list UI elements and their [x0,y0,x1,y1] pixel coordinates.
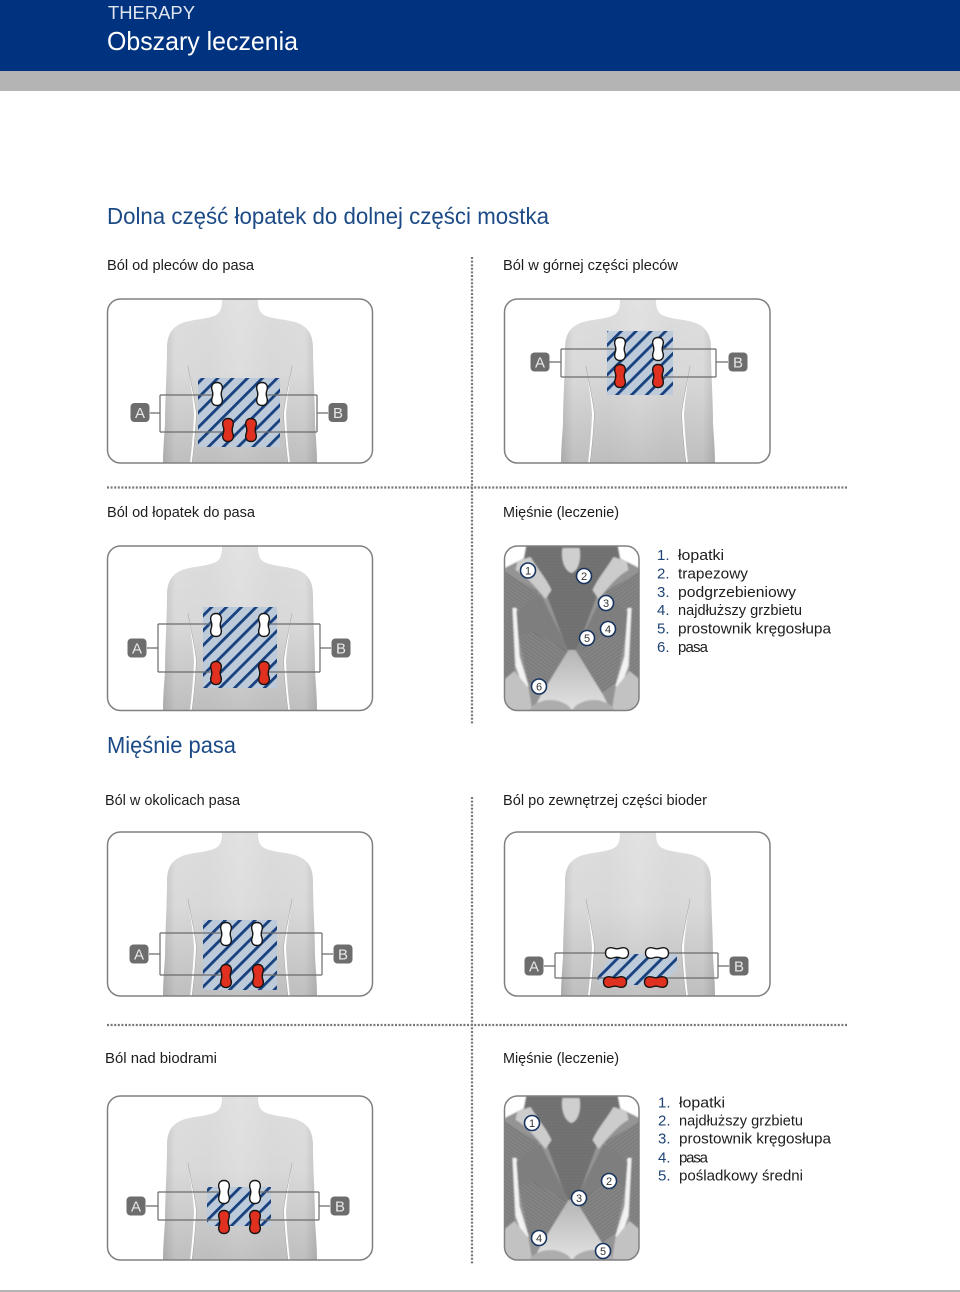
legend: muscles 1: 1. [657,547,670,564]
legend: muscles 2: łopatki [679,1094,725,1112]
panel: muscles diagram 1: 5 [584,633,590,645]
heading: section 1: Dolna część łopatek do dolnej części mostka [107,203,549,229]
legend: muscles 1: pasa [678,639,709,656]
panel: muscles diagram 1: 2 [581,571,587,583]
panel: pain in upper back: A [535,354,545,372]
legend: muscles 2: 3. [658,1130,671,1148]
legend: muscles 1: 3. [657,584,670,601]
subheading: Ból w górnej części pleców [503,257,678,274]
panel: muscles diagram 1: 4 [605,624,611,636]
panel: muscles diagram 1: 1 [525,566,531,578]
legend: muscles 1: trapezowy [678,566,749,582]
panel: pain from back to waist [108,299,372,463]
legend: muscles 2: prostownik kręgosłupa [679,1130,832,1148]
legend: muscles 2: pasa [679,1150,709,1166]
panel: muscles diagram 2 [502,1094,642,1282]
panel: pain from shoulder blades to waist [108,546,372,710]
panel: pain on outer hips: A [529,958,539,976]
legend: muscles 1: podgrzebieniowy [678,584,797,601]
panel: pain in upper back: B [733,354,743,372]
panel: pain on outer hips [504,832,770,996]
subheading: Ból nad biodrami [105,1050,217,1067]
subheading: Ból po zewnętrzej części bioder [503,792,707,809]
legend: muscles 1: 5. [657,620,670,638]
page title: Obszary leczenia [107,26,299,56]
subheading: Mięśnie (leczenie) [503,1050,619,1067]
header band [0,0,960,91]
subheading: Ból od pleców do pasa [107,257,255,274]
legend: muscles 2 [658,1094,832,1184]
panel: pain from back to waist: B [333,405,343,422]
panel: muscles diagram 1 [502,544,642,732]
panel: muscles diagram 2: 1 [529,1118,535,1130]
legend: muscles 1 [657,547,832,656]
legend: muscles 2: 1. [658,1094,671,1112]
panel: pain above the hips: B [335,1198,345,1216]
legend: muscles 1: 6. [657,639,670,656]
panel: muscles diagram 2: 3 [576,1193,582,1205]
panel: pain above the hips [108,1096,372,1260]
panel: pain on outer hips: B [734,958,744,976]
panel: pain from shoulder blades to waist: A [132,640,142,658]
legend: muscles 1: 4. [657,602,670,619]
panel: pain from shoulder blades to waist: B [336,640,346,658]
panel: muscles diagram 2: 2 [606,1176,612,1188]
panel: pain around the waist: A [134,946,144,964]
legend: muscles 1: najdłuższy grzbietu [678,602,802,619]
panel: muscles diagram 1: 6 [536,682,542,694]
panel: pain around the waist [108,832,372,996]
heading: section 2: Mięśnie pasa [107,732,236,758]
legend: muscles 1: 2. [657,566,670,582]
legend: muscles 2: najdłuższy grzbietu [679,1112,803,1130]
subheading: Ból od łopatek do pasa [107,504,256,521]
panel: pain above the hips: A [131,1198,141,1216]
legend: muscles 2: 5. [658,1168,671,1184]
panel: muscles diagram 2: 5 [600,1246,606,1258]
legend: muscles 2: 2. [658,1112,671,1130]
legend: muscles 2: pośladkowy średni [679,1168,803,1184]
panel: pain from back to waist: A [135,405,145,422]
legend: muscles 2: 4. [658,1150,671,1166]
legend: muscles 1: łopatki [678,547,724,564]
subheading: Ból w okolicach pasa [105,792,241,809]
panel: pain in upper back [504,299,770,463]
panel: muscles diagram 2: 4 [536,1233,542,1245]
section label: THERAPY [108,3,195,23]
panel: pain around the waist: B [338,946,348,964]
legend: muscles 1: prostownik kręgosłupa [678,620,832,638]
panel: muscles diagram 1: 3 [603,598,609,610]
subheading: Mięśnie (leczenie) [503,504,619,521]
